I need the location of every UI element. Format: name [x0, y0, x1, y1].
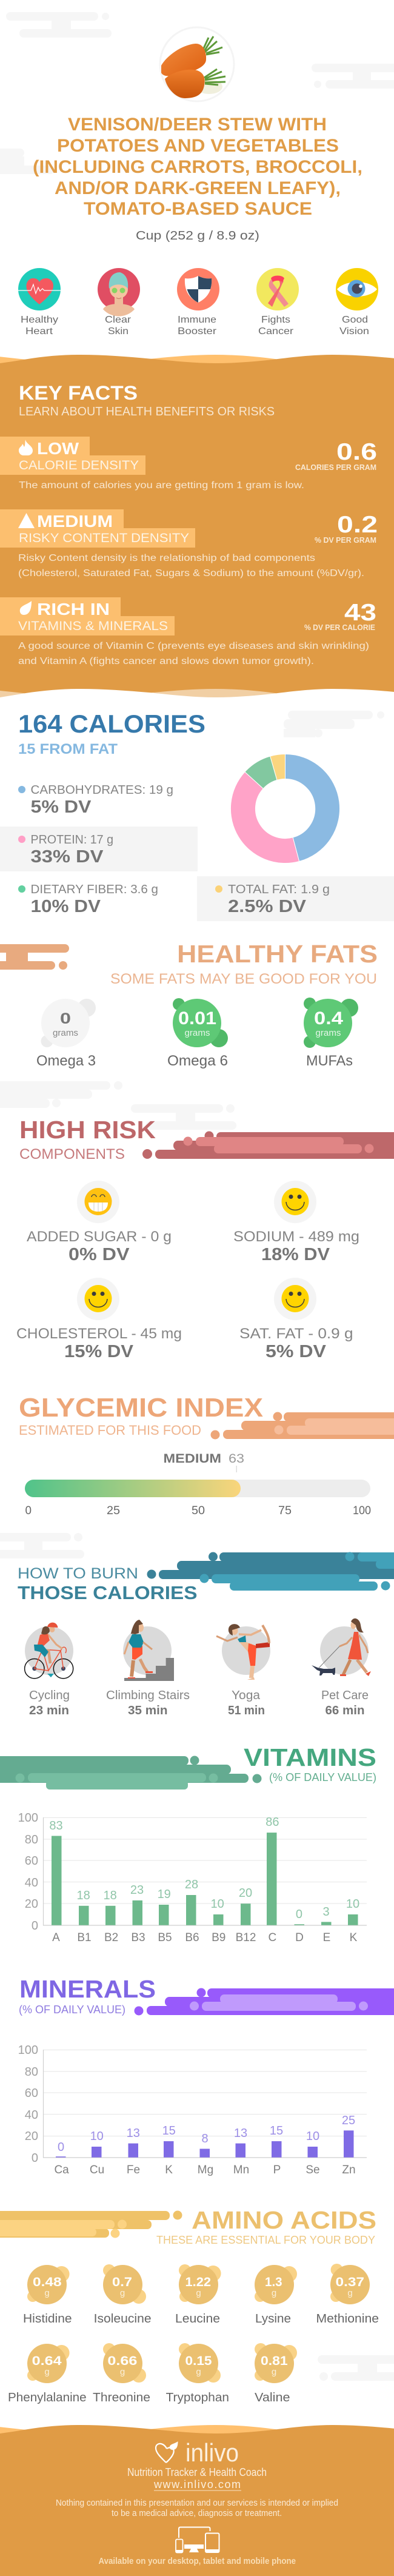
icon: immune booster	[177, 268, 219, 310]
bar chart: minerals: Zn	[342, 2164, 356, 2176]
row backgrounds	[0, 827, 394, 921]
bar chart: vitamins: D	[295, 1931, 304, 1944]
saturated fat	[239, 1278, 353, 1361]
panel: amino acids	[0, 2206, 379, 2404]
bar chart: vitamins: 100	[18, 1811, 38, 1825]
activity labels: 51 min	[228, 1704, 265, 1717]
heading: GLYCEMIC INDEX	[19, 1393, 263, 1423]
bar chart: vitamins: 86	[265, 1816, 279, 1829]
saturated fat: 5% DV	[265, 1342, 327, 1361]
gauge bar	[25, 1480, 370, 1497]
logo	[156, 2438, 239, 2467]
protein	[18, 833, 113, 867]
bar chart: minerals: 20	[25, 2130, 38, 2143]
amino: lysine: 1.3	[265, 2275, 282, 2289]
bar chart: minerals: Cu	[90, 2164, 104, 2176]
icon labels: Booster	[178, 326, 217, 337]
amino: leucine	[175, 2264, 221, 2326]
dietary fiber: 10% DV	[30, 897, 101, 916]
heading: MINERALS	[19, 1975, 156, 2003]
icon: yoga	[216, 1624, 270, 1680]
carbohydrates: 5% DV	[30, 797, 92, 817]
decorative banner	[142, 1132, 394, 1159]
dietary fiber: DIETARY FIBER: 3.6 g	[30, 883, 158, 896]
amino: histidine: Histidine	[23, 2312, 72, 2326]
title: TOMATO-BASED SAUCE	[84, 199, 312, 219]
food image: carrots	[160, 27, 234, 101]
icon labels: Heart	[25, 326, 53, 337]
fact: rich in vitamins and minerals: % DV PER CALORIE	[304, 623, 375, 632]
added sugar: 0% DV	[68, 1245, 130, 1264]
activity labels: Cycling	[29, 1689, 70, 1702]
subheading: COMPONENTS	[19, 1146, 125, 1162]
amino: phenylalanine: 0.64	[32, 2354, 62, 2368]
bar chart: minerals: 13	[127, 2127, 140, 2140]
mufas	[304, 998, 358, 1069]
bar chart: vitamins: B9	[212, 1931, 225, 1944]
amino: tryptophan	[166, 2343, 229, 2404]
icon labels: Clear	[105, 315, 132, 325]
panel: calories	[0, 709, 394, 921]
omega 3: Omega 3	[36, 1053, 96, 1069]
amino: isoleucine: 0.7	[112, 2275, 132, 2289]
icon labels: Healthy	[21, 315, 58, 325]
subheading: LEARN ABOUT HEALTH BENEFITS OR RISKS	[19, 405, 275, 418]
icon labels: Immune	[178, 315, 216, 325]
bar chart: vitamins: B1	[77, 1931, 92, 1944]
bar chart: vitamins: 0	[32, 1919, 38, 1933]
bar chart: minerals: 40	[25, 2108, 38, 2122]
amino: threonine	[93, 2343, 150, 2404]
panel: how to burn those calories: THOSE CALORIES	[18, 1582, 198, 1603]
disclaimer: to be a medical advice, diagnosis or treatment.	[112, 2509, 282, 2518]
cholesterol: 15% DV	[64, 1342, 134, 1361]
amino: valine: Valine	[255, 2391, 290, 2404]
bar chart: minerals: 60	[25, 2087, 38, 2100]
amino: isoleucine: g	[120, 2288, 125, 2298]
website: www.inlivo.com	[153, 2478, 241, 2490]
title	[33, 115, 362, 219]
mufas: 0.4	[314, 1008, 343, 1028]
logo: inlivo	[185, 2438, 239, 2467]
cholesterol: CHOLESTEROL - 45 mg	[16, 1326, 182, 1342]
bar chart: minerals: 8	[201, 2132, 209, 2145]
omega 6: 0.01	[178, 1008, 216, 1028]
availability note: Available on your desktop, tablet and mobile phone	[98, 2557, 296, 2566]
bar chart: vitamins: 28	[185, 1878, 198, 1891]
bar chart: vitamins: B5	[158, 1931, 172, 1944]
amino: tryptophan: Tryptophan	[166, 2391, 229, 2404]
bar chart: vitamins: B3	[131, 1931, 145, 1944]
amino: isoleucine	[94, 2264, 152, 2326]
activity labels	[29, 1689, 369, 1717]
icon: climbing stairs	[123, 1620, 174, 1681]
heading: HOW TO BURN	[18, 1565, 138, 1582]
bar chart: minerals: 10	[306, 2130, 319, 2143]
subheading: (% OF DAILY VALUE)	[269, 1771, 376, 1783]
bar chart: minerals: 0	[58, 2141, 64, 2154]
saturated fat: SAT. FAT - 0.9 g	[239, 1326, 353, 1342]
subheading: 15 FROM FAT	[18, 741, 118, 757]
panel: minerals	[18, 1975, 394, 2176]
health benefit icons	[18, 268, 378, 317]
bar chart: minerals: Mn	[233, 2164, 249, 2176]
bar chart: vitamins: 3	[322, 1905, 330, 1919]
fact: medium risky content density	[0, 509, 378, 579]
fact: low calorie density: CALORIES PER GRAM	[295, 463, 376, 472]
icon labels: Fights	[261, 315, 290, 325]
gauge scale: 25	[107, 1504, 120, 1517]
amino: threonine: Threonine	[93, 2391, 150, 2404]
bar chart: minerals: 80	[25, 2065, 38, 2079]
fact: medium risky content density: Risky Content density is the relationship of bad components	[18, 553, 315, 563]
heading: HEALTHY FATS	[177, 940, 378, 968]
disclaimer: Nothing contained in this presentation and our services is intended or implied	[56, 2498, 338, 2508]
mufas: MUFAs	[306, 1053, 353, 1069]
bar chart: vitamins: C	[269, 1931, 276, 1944]
amino: leucine: g	[196, 2288, 201, 2298]
fact: low calorie density: CALORIE DENSITY	[19, 458, 139, 472]
carbohydrates: CARBOHYDRATES: 19 g	[30, 783, 173, 797]
bar chart: vitamins: 40	[25, 1876, 38, 1890]
fact: medium risky content density: (Cholesterol, Saturated Fat, Sugars & Sodium) to the amount (%DV/gr).	[18, 568, 364, 579]
amino: methionine: Methionine	[316, 2312, 379, 2326]
decorative banner	[211, 1412, 394, 1440]
protein: 33% DV	[30, 847, 104, 867]
total fat: 2.5% DV	[228, 897, 307, 916]
bar chart: vitamins: B12	[236, 1931, 256, 1944]
title: POTATOES AND VEGETABLES	[57, 136, 339, 156]
fact: low calorie density: The amount of calories you are getting from 1 gram is low.	[19, 480, 304, 491]
bar chart: vitamins: E	[323, 1931, 330, 1944]
heading: AMINO ACIDS	[192, 2206, 376, 2234]
sodium: 18% DV	[261, 1245, 330, 1264]
omega 6: Omega 6	[167, 1053, 228, 1069]
fact: medium risky content density: 0.2	[337, 512, 378, 538]
amino: valine: g	[272, 2367, 276, 2377]
subheading: ESTIMATED FOR THIS FOOD	[19, 1423, 201, 1438]
bar chart: minerals: Mg	[198, 2164, 213, 2176]
icon labels	[21, 315, 369, 337]
amino: histidine	[23, 2265, 72, 2326]
amino: tryptophan: 0.15	[185, 2354, 212, 2368]
icon: healthy heart	[18, 268, 61, 310]
heading: 164 CALORIES	[18, 709, 205, 738]
amino: lysine: g	[272, 2288, 276, 2298]
amino: leucine: 1.22	[185, 2275, 211, 2289]
amino: phenylalanine	[8, 2344, 87, 2404]
title: AND/OR DARK-GREEN LEAFY),	[55, 178, 341, 198]
fact: medium risky content density: % DV PER GRAM	[315, 535, 376, 545]
decorative banner	[0, 944, 69, 970]
bar chart: minerals: 15	[162, 2124, 176, 2138]
activity labels: Yoga	[232, 1689, 261, 1702]
amino: leucine: Leucine	[175, 2312, 220, 2326]
activity labels: 66 min	[325, 1704, 365, 1717]
bar chart: minerals: 15	[270, 2124, 283, 2138]
activity labels: Pet Care	[321, 1689, 369, 1702]
gauge scale	[25, 1504, 371, 1517]
gauge scale: 0	[25, 1504, 32, 1517]
heading: VITAMINS	[244, 1743, 376, 1771]
bar chart: vitamins: 20	[25, 1897, 38, 1911]
decorative banner	[0, 1756, 262, 1789]
fact: rich in vitamins and minerals	[0, 597, 376, 666]
panel: key facts	[0, 355, 394, 697]
heading: KEY FACTS	[19, 382, 138, 404]
fact: rich in vitamins and minerals: A good source of Vitamin C (prevents eye diseases and skin wrinkling)	[18, 641, 369, 651]
gauge label: MEDIUM	[164, 1452, 221, 1466]
icon: clear skin	[98, 268, 140, 317]
subheading: SOME FATS MAY BE GOOD FOR YOU	[110, 971, 377, 987]
bar chart: vitamins: A	[52, 1931, 60, 1944]
omega 3	[36, 999, 96, 1069]
bar chart: minerals: 10	[90, 2130, 104, 2143]
protein: PROTEIN: 17 g	[30, 833, 113, 847]
bar chart: minerals: Se	[306, 2164, 320, 2176]
gauge scale: 100	[353, 1504, 371, 1517]
added sugar	[27, 1181, 172, 1264]
amino: histidine: 0.48	[33, 2275, 62, 2289]
bar chart: vitamins	[18, 1811, 367, 1944]
title: (INCLUDING CARROTS, BROCCOLI,	[33, 157, 362, 177]
activity labels: 35 min	[128, 1704, 167, 1717]
bar chart: minerals: 0	[32, 2152, 38, 2165]
amino: methionine: g	[347, 2288, 353, 2298]
dietary fiber	[18, 883, 158, 916]
bar chart: minerals: Ca	[54, 2164, 69, 2176]
panel: how to burn those calories	[18, 1552, 394, 1717]
title: VENISON/DEER STEW WITH	[68, 115, 327, 135]
omega 6	[167, 998, 228, 1069]
panel: glycemic index	[19, 1393, 394, 1517]
bar chart: minerals: Fe	[127, 2164, 140, 2176]
icon: cycling	[25, 1623, 73, 1679]
amino: valine	[255, 2343, 297, 2404]
amino: threonine: 0.66	[107, 2354, 137, 2368]
donut chart	[230, 754, 340, 864]
icon: warning triangle	[18, 513, 35, 528]
bar chart: vitamins: 80	[25, 1833, 38, 1846]
icon: devices	[176, 2527, 219, 2553]
bar chart: minerals: 13	[234, 2127, 247, 2140]
tagline: Nutrition Tracker & Health Coach	[127, 2466, 267, 2478]
icon labels: Vision	[339, 326, 369, 337]
fact: low calorie density: LOW	[37, 439, 79, 458]
amino: phenylalanine: g	[44, 2367, 50, 2377]
amino: methionine: 0.37	[336, 2275, 364, 2289]
amino: lysine: Lysine	[255, 2312, 291, 2326]
bar chart: vitamins: 0	[296, 1908, 302, 1921]
bar chart: minerals: 25	[342, 2114, 355, 2127]
bar chart: vitamins: 20	[239, 1887, 252, 1900]
fact: low calorie density: 0.6	[336, 439, 377, 465]
activity labels: Climbing Stairs	[106, 1689, 190, 1702]
panel: vitamins	[0, 1743, 376, 1944]
icon: flame	[19, 440, 33, 455]
fact: rich in vitamins and minerals: VITAMINS & MINERALS	[18, 619, 168, 633]
bar chart: vitamins: 83	[49, 1819, 63, 1833]
bar chart: vitamins: 23	[130, 1883, 144, 1897]
fact: medium risky content density: MEDIUM	[37, 512, 113, 531]
bar chart: vitamins: B2	[104, 1931, 118, 1944]
icon: leaf	[20, 601, 32, 615]
bar chart: minerals: K	[165, 2164, 173, 2176]
icon labels: Good	[342, 315, 368, 325]
subheading: (% OF DAILY VALUE)	[19, 2004, 125, 2016]
bar chart: vitamins: 18	[76, 1889, 90, 1902]
bar chart: minerals: P	[273, 2164, 281, 2176]
sodium	[233, 1181, 359, 1264]
bar chart: vitamins: K	[350, 1931, 358, 1944]
icon labels: Skin	[108, 326, 129, 337]
total fat	[215, 883, 330, 916]
amino: isoleucine: Isoleucine	[94, 2312, 152, 2326]
bar chart: vitamins: 10	[210, 1897, 224, 1911]
decorative banner	[135, 1988, 394, 2016]
bar chart: vitamins: 18	[103, 1889, 117, 1902]
decorative banner	[147, 1552, 394, 1591]
amino: methionine	[316, 2264, 379, 2326]
amino: phenylalanine: Phenylalanine	[8, 2391, 87, 2404]
amino: valine: 0.81	[261, 2354, 288, 2368]
subheading: THESE ARE ESSENTIAL FOR YOUR BODY	[156, 2233, 375, 2246]
icon: fights cancer	[256, 268, 299, 310]
fact: rich in vitamins and minerals: RICH IN	[37, 600, 110, 619]
decorative banner	[0, 2211, 182, 2238]
bar chart: vitamins: 60	[25, 1854, 38, 1868]
disclaimer	[56, 2498, 338, 2518]
fact: low calorie density	[0, 437, 377, 491]
icon: good vision	[336, 268, 378, 310]
gauge scale: 50	[192, 1504, 205, 1517]
amino: threonine: g	[120, 2367, 125, 2377]
gauge scale: 75	[278, 1504, 292, 1517]
activity labels: 23 min	[29, 1704, 69, 1717]
bar chart: minerals	[18, 2044, 367, 2176]
omega 6: grams	[184, 1028, 210, 1038]
sodium: SODIUM - 489 mg	[233, 1229, 359, 1245]
mufas: grams	[315, 1028, 341, 1038]
total fat: TOTAL FAT: 1.9 g	[228, 883, 330, 896]
bar chart: minerals: 100	[18, 2044, 38, 2057]
amino: tryptophan: g	[196, 2367, 201, 2377]
panel: footer	[0, 2425, 394, 2576]
amino: histidine: g	[44, 2288, 50, 2298]
gauge label	[164, 1452, 244, 1472]
fact: rich in vitamins and minerals: and Vitamin A (fights cancer and slows down tumor growth).	[18, 656, 314, 666]
omega 3: 0	[60, 1010, 71, 1027]
cholesterol	[16, 1278, 182, 1361]
icon labels: Cancer	[258, 326, 294, 337]
bar chart: vitamins: 19	[158, 1888, 171, 1901]
icon: pet care	[312, 1618, 371, 1676]
amino: lysine	[255, 2265, 297, 2326]
serving size: Cup (252 g / 8.9 oz)	[136, 229, 259, 243]
heading: HIGH RISK	[19, 1116, 156, 1144]
carbohydrates	[18, 783, 173, 817]
panel: high risk components	[16, 1116, 394, 1361]
added sugar: ADDED SUGAR - 0 g	[27, 1229, 172, 1245]
bar chart: vitamins: 10	[346, 1897, 359, 1911]
panel: healthy fats	[0, 940, 378, 1069]
fact: medium risky content density: RISKY CONTENT DENSITY	[19, 531, 189, 545]
omega 3: grams	[53, 1028, 78, 1038]
bar chart: vitamins: B6	[185, 1931, 199, 1944]
gauge label: 63	[229, 1452, 244, 1466]
fact: rich in vitamins and minerals: 43	[344, 600, 376, 626]
